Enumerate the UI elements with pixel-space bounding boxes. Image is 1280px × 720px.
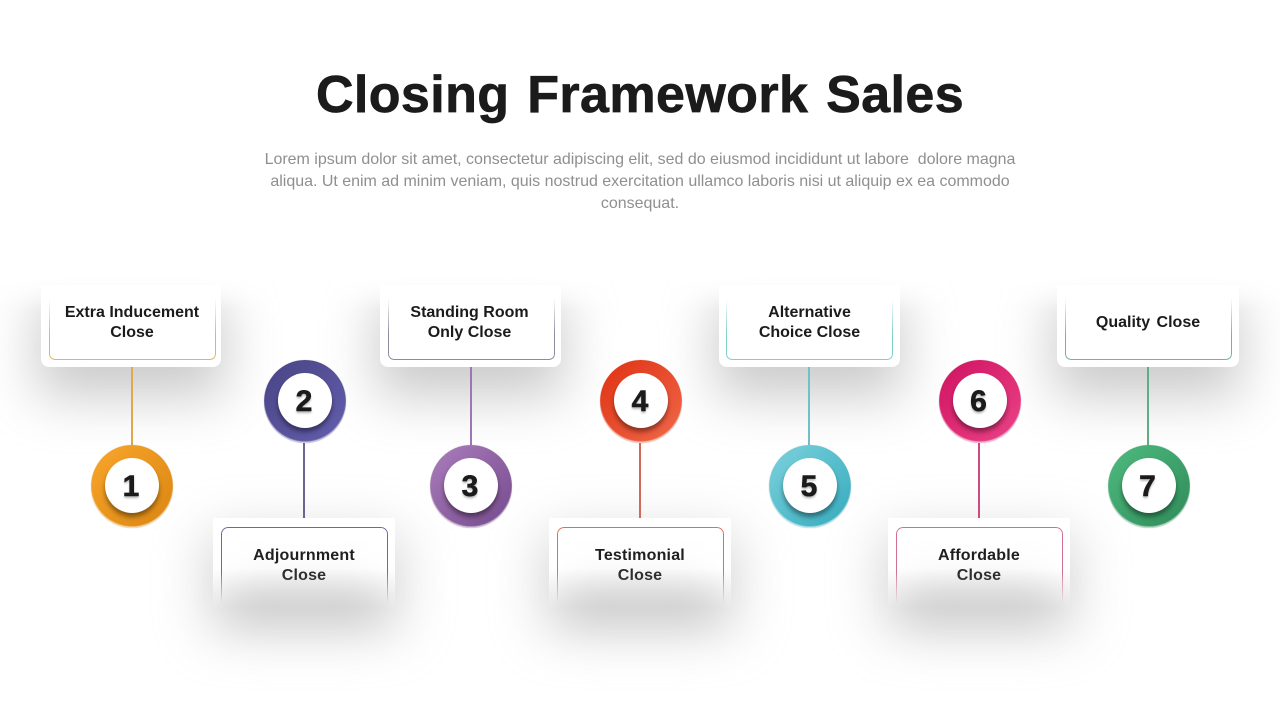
step 2 label: Adjournment bbox=[253, 547, 355, 564]
step 1 label: Extra Inducement bbox=[65, 304, 199, 321]
icon: number 3 badge: 3 bbox=[462, 470, 478, 502]
icon: number 6 badge: 6 bbox=[970, 384, 987, 418]
icon: number 2 badge bbox=[264, 360, 346, 442]
panel: step 5 card bbox=[689, 297, 929, 423]
step 1 label bbox=[65, 304, 199, 341]
connector 1 bbox=[131, 367, 133, 445]
connector 2 bbox=[303, 442, 305, 518]
step 6 label bbox=[938, 547, 1020, 584]
panel: step 6 card bbox=[861, 510, 1097, 656]
icon: number 7 badge: 7 bbox=[1139, 470, 1156, 502]
icon: number 1 badge: 1 bbox=[123, 470, 139, 502]
panel: step 2 card bbox=[186, 510, 422, 656]
step 3 label: Only Close bbox=[428, 324, 511, 341]
icon: number 4 badge bbox=[600, 360, 682, 442]
connector 3 bbox=[470, 367, 472, 445]
panel: step 3 card bbox=[350, 297, 590, 423]
connector 4 bbox=[639, 442, 641, 518]
subtitle text block: aliqua. Ut enim ad minim veniam, quis nostrud exercitation ullamco laboris nisi ut aliquip ex ea commodo bbox=[270, 173, 1010, 190]
step 4 label bbox=[595, 547, 685, 584]
title: Closing Framework Sales bbox=[316, 66, 964, 124]
subtitle text block: Lorem ipsum dolor sit amet, consectetur adipiscing elit, sed do eiusmod incididunt ut labore dolore magna bbox=[265, 151, 1015, 168]
panel: step 7 card bbox=[1027, 298, 1267, 423]
step 2 label: Close bbox=[282, 567, 326, 584]
step 2 label bbox=[253, 547, 355, 584]
connector 6 bbox=[978, 442, 980, 518]
icon: number 4 badge: 4 bbox=[632, 384, 648, 418]
step 5 label: Choice Close bbox=[759, 324, 860, 341]
icon: number 6 badge bbox=[938, 360, 1020, 442]
icon: number 1 badge bbox=[91, 444, 173, 528]
subtitle text block: consequat. bbox=[601, 195, 679, 212]
step 4 label: Testimonial bbox=[595, 547, 685, 564]
icon: number 2 badge: 2 bbox=[296, 384, 312, 418]
panel: step 1 card bbox=[11, 296, 251, 423]
panel: step 4 card bbox=[522, 510, 758, 656]
icon: number 5 badge bbox=[769, 444, 851, 528]
icon: number 7 badge bbox=[1108, 444, 1190, 528]
subtitle text block bbox=[265, 151, 1016, 212]
step 5 label: Alternative bbox=[768, 304, 851, 321]
step 6 label: Affordable bbox=[938, 547, 1020, 564]
connector 7 bbox=[1147, 367, 1149, 445]
step 1 label: Close bbox=[110, 324, 154, 341]
step 3 label: Standing Room bbox=[410, 304, 529, 321]
icon: number 5 badge: 5 bbox=[801, 470, 817, 502]
step 4 label: Close bbox=[618, 567, 662, 584]
step 7 label: Quality Close bbox=[1096, 314, 1200, 331]
step 5 label bbox=[759, 304, 860, 341]
connector 5 bbox=[808, 367, 810, 445]
icon: number 3 badge bbox=[430, 444, 512, 528]
step 3 label bbox=[410, 304, 529, 341]
step 6 label: Close bbox=[957, 567, 1001, 584]
